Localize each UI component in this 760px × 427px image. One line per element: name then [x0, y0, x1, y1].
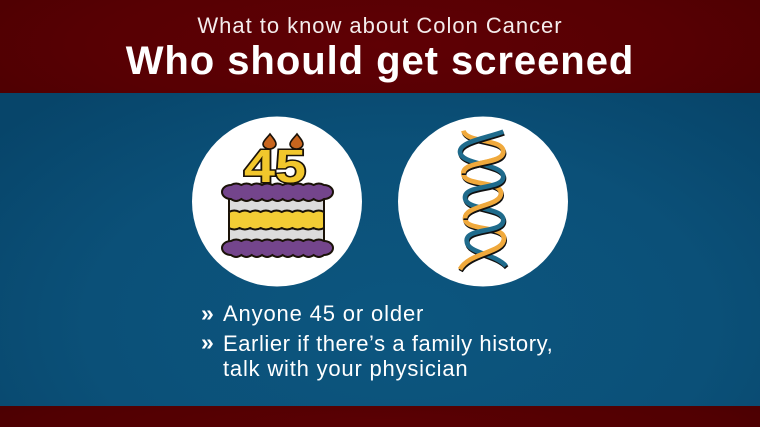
title: Who should get screened — [126, 39, 634, 83]
bullet list — [201, 300, 553, 381]
orange strand over crossings — [460, 152, 505, 271]
background panel — [0, 93, 760, 406]
blue strand — [460, 132, 507, 268]
number 45 candles: 45 — [244, 140, 306, 192]
bullet: age: » — [201, 300, 214, 326]
header band — [0, 0, 760, 93]
top frosting — [222, 184, 333, 201]
subtitle: What to know about Colon Cancer — [197, 13, 563, 38]
icon: candle flames — [263, 134, 303, 149]
orange strand under — [460, 131, 505, 271]
bullet: family history: talk with your physician — [223, 356, 468, 381]
bullet: age: Anyone 45 or older — [223, 301, 424, 326]
cake body — [222, 184, 333, 257]
bullet: family history: » — [201, 329, 214, 355]
bullet: family history — [201, 329, 553, 381]
footer band — [0, 406, 760, 427]
icon circle: DNA helix — [398, 116, 568, 286]
bottom frosting — [222, 240, 333, 257]
icon circle: birthday cake — [192, 116, 362, 286]
bullet: family history: Earlier if there’s a family history, — [223, 331, 553, 356]
yellow filling — [229, 210, 324, 230]
